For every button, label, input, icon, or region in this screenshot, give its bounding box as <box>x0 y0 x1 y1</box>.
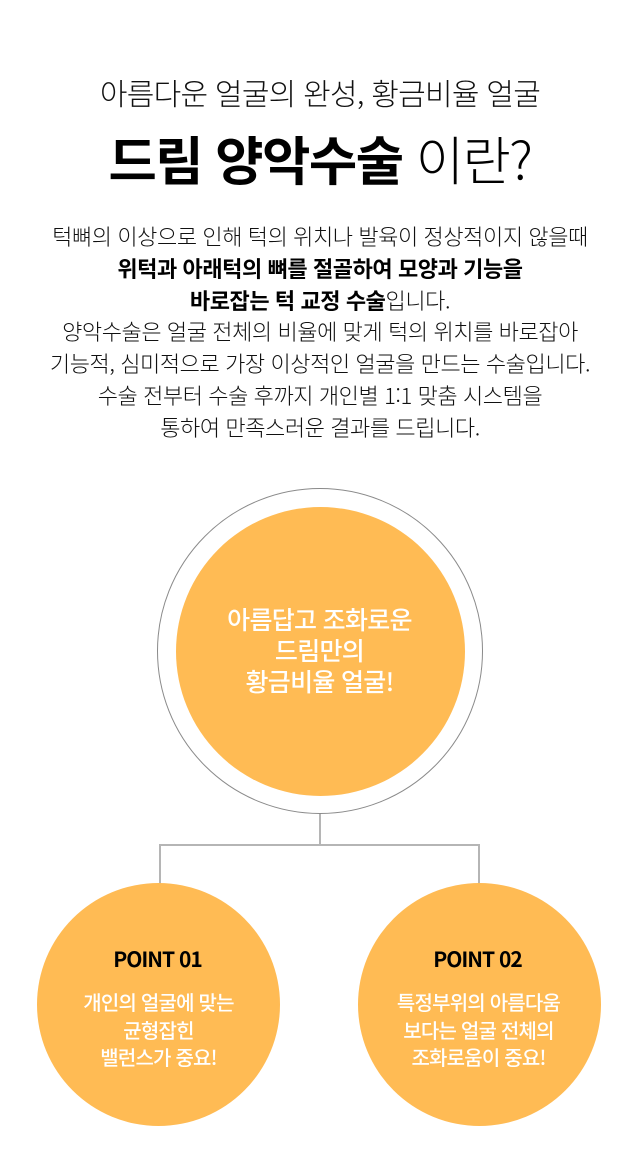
description text <box>50 220 590 443</box>
main circle text: 드림만의 <box>275 632 364 668</box>
point 01 text: 밸런스가 중요! <box>100 1042 217 1071</box>
point 01 heading: POINT 01 <box>113 944 202 974</box>
description text: 양악수술은 얼굴 전체의 비율에 맞게 턱의 위치를 바로잡아 <box>62 315 578 347</box>
subtitle: 아름다운 얼굴의 완성, 황금비율 얼굴 <box>100 70 540 114</box>
description text: 턱뼈의 이상으로 인해 턱의 위치나 발육이 정상적이지 않을때 <box>52 220 588 252</box>
description text: 수술 전부터 수술 후까지 개인별 1:1 맞춤 시스템을 <box>98 379 542 411</box>
circle: point 01 <box>37 883 280 1126</box>
description text: 통하여 만족스러운 결과를 드립니다. <box>160 411 480 443</box>
point 01 text <box>83 987 234 1071</box>
point 01 text: 개인의 얼굴에 맞는 <box>83 987 234 1016</box>
point 02 text: 보다는 얼굴 전체의 <box>403 1014 554 1044</box>
main title: 드림 양악수술 이란? <box>108 120 531 196</box>
circle: point 02 <box>358 883 601 1126</box>
main circle text: 황금비율 얼굴! <box>245 663 394 699</box>
point 02 heading: POINT 02 <box>433 944 522 974</box>
description text: 기능적, 심미적으로 가장 이상적인 얼굴을 만드는 수술입니다. <box>50 347 590 379</box>
point 01 text: 균형잡힌 <box>123 1014 194 1044</box>
point 02 text: 특정부위의 아름다움 <box>397 987 560 1016</box>
main circle <box>176 507 465 796</box>
main circle text <box>227 601 412 699</box>
main circle outline <box>157 488 483 814</box>
description text: 위턱과 아래턱의 뼈를 절골하여 모양과 기능을 <box>117 252 523 284</box>
point 02 text <box>397 987 560 1071</box>
point 02 text: 조화로움이 중요! <box>411 1042 546 1071</box>
main circle text: 아름답고 조화로운 <box>227 601 412 637</box>
description text: 바로잡는 턱 교정 수술입니다. <box>190 284 450 316</box>
